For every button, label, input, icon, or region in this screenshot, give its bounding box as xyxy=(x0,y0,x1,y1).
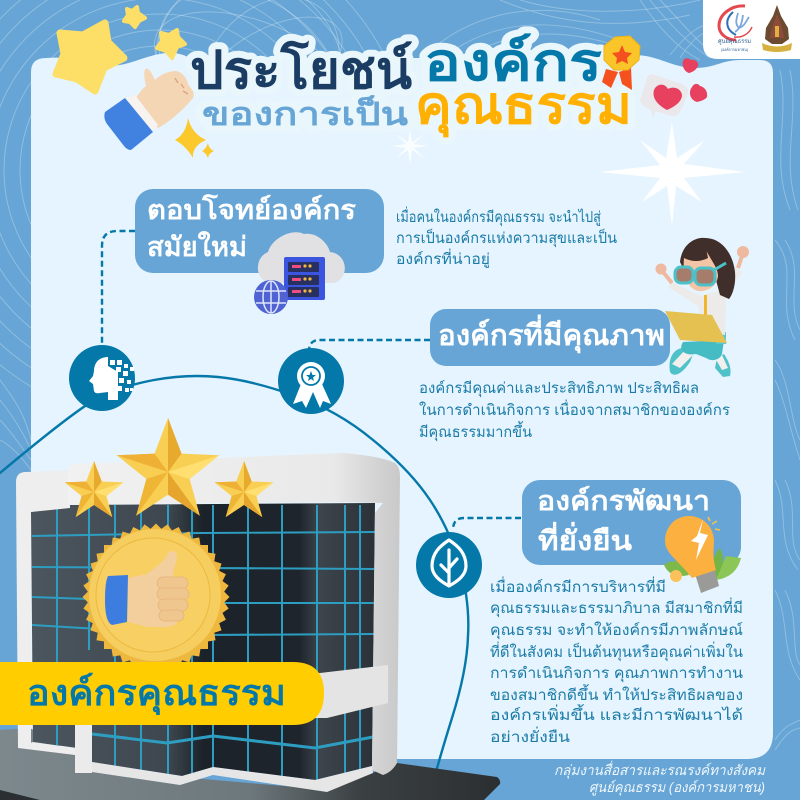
icon: light bulb with leaves xyxy=(664,516,741,593)
body text: องค์กรเพิ่มขึ้น และมีการพัฒนาได้ xyxy=(490,704,743,724)
heading text: ที่ยั่งยืน xyxy=(538,521,633,556)
heading text: องค์กรที่มีคุณภาพ xyxy=(438,314,665,353)
logo: Moral Center xyxy=(718,6,752,52)
title line: ประโยชน์: ประโยชน์ xyxy=(190,39,413,100)
body text xyxy=(419,380,730,442)
body text: ในการดำเนินกิจการ เนื่องจากสมาชิกขององค์กร xyxy=(419,399,730,419)
body text: เมื่อองค์กรมีการบริหารที่มี xyxy=(490,576,666,596)
kerb: front base xyxy=(92,762,373,792)
heading text: สมัยใหม่ xyxy=(147,231,247,262)
heading text: องค์กรพัฒนา xyxy=(537,485,710,516)
credit: กลุ่มงานสื่อสารและรณรงค์ทางสังคม xyxy=(554,760,766,779)
title xyxy=(190,33,632,138)
icon: yellow stars xyxy=(56,7,185,91)
glass front xyxy=(31,503,375,780)
panel decoration: white sparkle xyxy=(392,122,745,226)
body text xyxy=(490,576,743,746)
credit: ศูนย์คุณธรรม (องค์การมหาชน) xyxy=(589,779,765,796)
icon: AI head xyxy=(69,345,135,411)
body text: เมื่อคนในองค์กรมีคุณธรรม จะนำไปสู่ xyxy=(396,206,601,227)
icon: leaf xyxy=(416,532,482,598)
body text: การดำเนินกิจการ คุณภาพการทำงาน xyxy=(490,665,743,683)
illustration: building xyxy=(0,453,500,800)
ground front edge xyxy=(0,790,40,800)
body text: ของสมาชิกดีขึ้น ทำให้ประสิทธิผลของ xyxy=(490,684,743,704)
ground plate xyxy=(0,728,500,800)
pillar xyxy=(75,725,92,773)
body text: การเป็นองค์กรแห่งความสุขและเป็น xyxy=(396,228,617,248)
cyan window grid xyxy=(32,505,376,790)
body text: อย่างยั่งยืน xyxy=(490,726,570,746)
body text: องค์กรที่น่าอยู่ xyxy=(396,248,490,268)
icon: three gold stars xyxy=(65,418,273,517)
heading text xyxy=(537,485,710,556)
logo: Moral Center: (องค์การมหาชน) xyxy=(721,47,749,52)
kerb: left base xyxy=(18,742,75,755)
heading bubble xyxy=(522,480,741,565)
icon: thumbs-up hand xyxy=(104,69,194,150)
panel: sustainable organisation xyxy=(490,480,743,746)
logo: temple emblem xyxy=(762,5,792,52)
mid ledge xyxy=(300,665,388,718)
body text: ที่ดีในสังคม เป็นต้นทุนหรือคุณค่าเพิ่มใน xyxy=(490,641,743,662)
title line: ของการเป็น: ของการเป็น xyxy=(202,94,408,132)
icon: cloud server globe xyxy=(254,232,345,314)
left wing frame xyxy=(16,470,70,748)
icon: gold seal with thumbs-up xyxy=(82,523,230,671)
body text: คุณธรรมและธรรมาภิบาล มีสมาชิกที่มี xyxy=(490,597,743,618)
body text: คุณธรรม จะทำให้องค์กรมีภาพลักษณ์ xyxy=(490,621,743,640)
panel: quality organisation xyxy=(419,238,749,442)
title line: คุณธรรม: คุณธรรม xyxy=(415,77,632,138)
heading text: ตอบโจทย์องค์กร xyxy=(147,193,357,225)
icon: medal xyxy=(602,36,640,90)
logo panel xyxy=(703,0,800,59)
banner text: องค์กรคุณธรรม xyxy=(27,672,286,716)
body text: มีคุณธรรมมากขึ้น xyxy=(419,421,532,442)
dashed connectors xyxy=(102,231,521,530)
heading text xyxy=(147,193,357,262)
logo: Moral Center: ศูนย์คุณธรรม xyxy=(718,37,751,45)
illustration: jumping girl with laptop xyxy=(656,238,749,377)
body text: องค์กรมีคุณค่าและประสิทธิภาพ ประสิทธิผล xyxy=(419,380,699,398)
icon: gold sparkles xyxy=(175,118,214,158)
icon: award ribbon xyxy=(278,348,344,414)
heading bubble xyxy=(135,189,384,273)
panel: modern organisation xyxy=(135,189,617,314)
title line: องค์กร: องค์กร xyxy=(424,33,602,92)
credit xyxy=(554,760,766,796)
roof slab and right column xyxy=(68,453,400,775)
banner: organisation of virtue xyxy=(0,662,324,725)
heading bubble xyxy=(430,309,670,366)
body text xyxy=(396,206,617,268)
icon: heart speech bubble xyxy=(640,58,707,119)
arc connector xyxy=(0,376,468,772)
